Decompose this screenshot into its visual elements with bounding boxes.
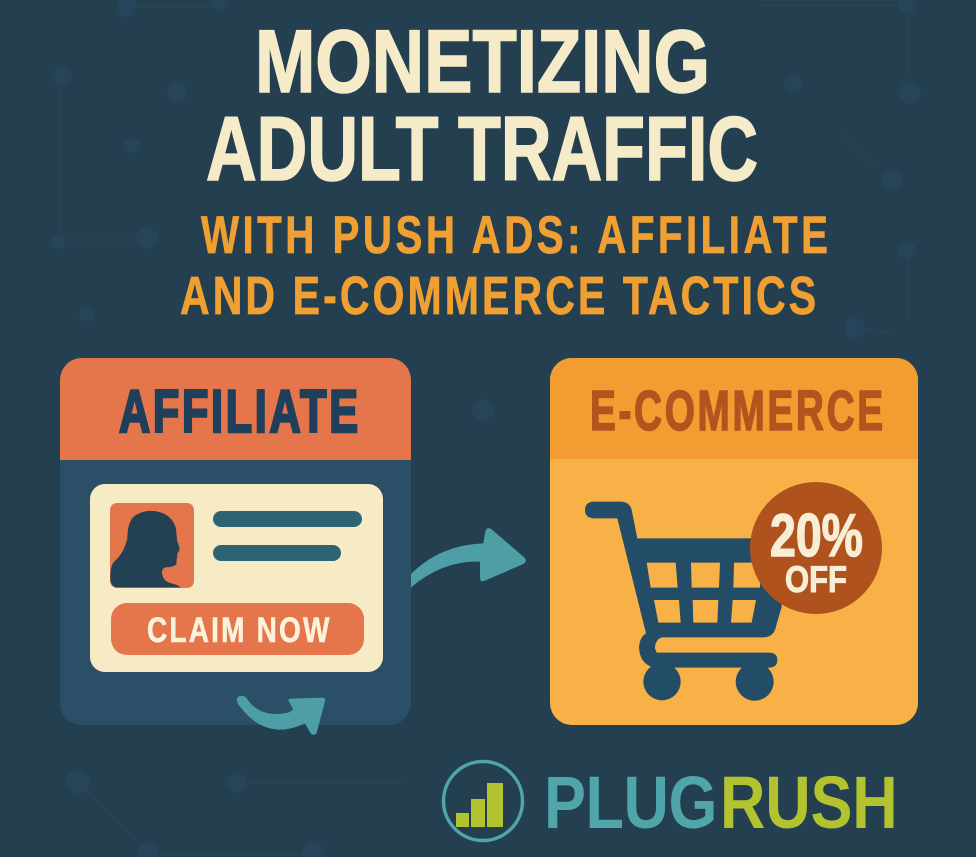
icon: bar chart in circle — [444, 762, 522, 840]
claim now button: CLAIM NOW — [147, 610, 329, 650]
text placeholder lines — [213, 511, 362, 561]
panel body — [550, 358, 918, 725]
panel header — [60, 358, 411, 460]
wordmark: RUSH — [720, 761, 898, 844]
wordmark — [544, 761, 898, 844]
discount badge: OFF — [785, 559, 847, 600]
logo: plugrush — [444, 761, 898, 844]
title — [206, 11, 758, 200]
panel body — [60, 358, 411, 725]
panel: e-commerce — [550, 358, 918, 725]
profile photo — [110, 503, 194, 588]
panel header — [550, 358, 918, 459]
discount badge — [750, 482, 882, 614]
subtitle — [180, 205, 828, 326]
panel: affiliate — [60, 358, 411, 735]
title: MONETIZING — [255, 11, 710, 111]
claim now button — [111, 603, 364, 655]
discount badge: 20% — [770, 502, 863, 569]
arrow: affiliate to e-commerce — [411, 528, 526, 587]
icon: shopping cart — [585, 502, 782, 701]
wordmark: PLUG — [544, 761, 717, 844]
heading: affiliate: AFFILIATE — [119, 379, 358, 446]
arrow: small curved — [237, 696, 325, 735]
offer card — [90, 484, 383, 672]
subtitle: WITH PUSH ADS: AFFILIATE — [201, 205, 828, 264]
heading: e-commerce: E-COMMERCE — [590, 380, 883, 443]
subtitle: AND E-COMMERCE TACTICS — [180, 267, 816, 326]
title: ADULT TRAFFIC — [206, 99, 758, 200]
